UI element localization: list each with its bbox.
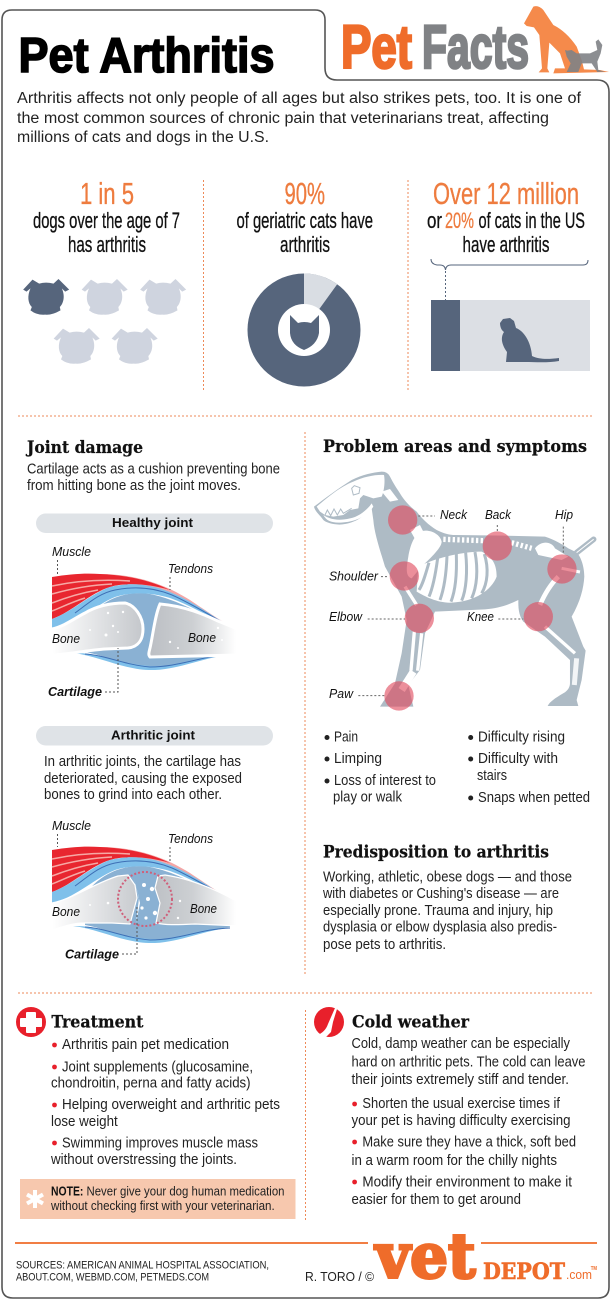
logo wordmark: Facts — [422, 13, 529, 81]
label: tendons — [168, 831, 213, 862]
heading: predisposition: Predisposition to arthritis — [323, 843, 549, 863]
diagram: arthritic joint — [52, 818, 240, 962]
label: cartilage — [65, 907, 137, 962]
label: bone right: Bone — [188, 630, 216, 645]
label: neck: Neck — [440, 507, 468, 522]
stat line with orange 20%: or — [427, 208, 442, 233]
stat: 90% of cats: of geriatric cats have — [236, 208, 373, 233]
panel: cold weather — [314, 1007, 586, 1208]
cold weather text: hard on arthritic pets. The cold can leave — [352, 1055, 586, 1071]
label pill: healthy joint: Healthy joint — [112, 515, 194, 530]
label: muscle — [52, 818, 91, 847]
symptoms list right — [468, 730, 590, 806]
icon: dog faces — [23, 279, 186, 364]
heading: treatment: Treatment — [51, 1013, 144, 1033]
label: muscle: Muscle — [52, 544, 91, 559]
label: hip: Hip — [555, 507, 573, 522]
symptoms list right: Difficulty rising — [478, 730, 565, 746]
stat: 90% of cats: 90% — [284, 176, 325, 211]
heading: problem areas: Problem areas and symptoms — [323, 437, 587, 457]
treatment list: lose weight — [51, 1114, 118, 1130]
cold weather list — [352, 1096, 576, 1208]
predisposition text: Working, athletic, obese dogs — and those — [323, 870, 572, 886]
predisposition text — [322, 870, 572, 953]
callout: note — [20, 1179, 296, 1219]
icon: asterisk — [27, 1190, 43, 1208]
logo wordmark — [341, 13, 529, 81]
label: cartilage — [48, 648, 118, 699]
cold weather text — [352, 1036, 586, 1088]
stat: 90% of cats — [236, 176, 373, 386]
callout: note: Never give your dog human medication — [86, 1185, 285, 1199]
callout: note: NOTE: — [51, 1185, 83, 1199]
intro text — [17, 90, 582, 146]
stat: 1 in 5 dogs: has arthritis — [68, 232, 146, 257]
title: Pet Arthritis — [18, 29, 274, 83]
heading: cold weather: Cold weather — [352, 1013, 470, 1033]
treatment list — [50, 1037, 280, 1168]
label pill: arthritic joint — [36, 726, 273, 746]
icon: grey cat — [565, 39, 605, 72]
panel: problem areas and symptoms — [314, 437, 594, 806]
logo: vet depot: .com — [566, 1267, 592, 1282]
icon: red circle with bone — [314, 1007, 344, 1037]
bracket — [431, 259, 588, 270]
diagram: healthy joint — [48, 544, 240, 699]
arthritic joint text: deteriorated, causing the exposed — [44, 771, 242, 787]
treatment list: without overstressing the joints. — [50, 1152, 237, 1168]
symptoms list right: stairs — [477, 768, 507, 784]
stat line with orange 20% — [427, 208, 585, 233]
label: bone left: Bone — [52, 904, 80, 919]
cold weather list: Shorten the usual exercise times if — [362, 1096, 561, 1112]
label: muscle: Muscle — [52, 818, 91, 833]
credit: R. TORO / © — [305, 1270, 375, 1284]
joint damage text: Cartilage acts as a cushion preventing bone — [27, 462, 280, 478]
panel: predisposition — [322, 843, 572, 953]
symptoms list right: Difficulty with — [478, 751, 558, 767]
symptoms list left — [324, 730, 436, 806]
stat: 1 in 5 dogs: 1 in 5 — [80, 176, 134, 211]
symptoms list right: Snaps when petted — [478, 790, 590, 806]
symptoms list left: Limping — [334, 751, 382, 767]
stat: 1 in 5 dogs — [23, 176, 186, 364]
diagram: dog skeleton — [314, 472, 594, 711]
intro text: millions of cats and dogs in the U.S. — [17, 129, 269, 146]
treatment list: Helping overweight and arthritic pets — [62, 1097, 280, 1113]
cold weather list: easier for them to get around — [352, 1192, 521, 1208]
predisposition text: especially prone. Trauma and injury, hip — [323, 903, 553, 919]
stat: over 12 million — [427, 176, 590, 371]
heading: joint damage: Joint damage — [25, 438, 143, 458]
panel: treatment — [16, 1007, 296, 1219]
label: back: Back — [485, 507, 512, 522]
logo: vet depot: TM — [591, 1266, 597, 1272]
label: tendons — [168, 561, 213, 590]
symptoms list left: play or walk — [333, 790, 403, 806]
cold weather list: in a warm room for the chilly nights — [352, 1153, 557, 1169]
arthritic joint text — [44, 754, 242, 803]
label: knee: Knee — [467, 609, 494, 624]
logo wordmark: Pet — [341, 13, 412, 81]
arthritic joint text: In arthritic joints, the cartilage has — [44, 754, 241, 770]
label: bone left: Bone — [52, 631, 80, 646]
cold weather text: their joints extremely stiff and tender. — [352, 1072, 569, 1088]
bar chart with cat — [431, 300, 590, 371]
stat: 90% of cats: arthritis — [280, 232, 330, 257]
sources — [16, 1260, 269, 1284]
logo: PetFacts — [341, 6, 609, 81]
logo: vet depot — [374, 1220, 597, 1292]
logo: vet depot: DEPOT — [483, 1259, 566, 1285]
intro text: Arthritis affects not only people of all ages but also strikes pets, too. It is one of — [17, 90, 582, 107]
donut chart — [248, 274, 360, 386]
cold weather text: Cold, damp weather can be especially — [352, 1036, 571, 1052]
label: cartilage: Cartilage — [65, 946, 119, 962]
symptoms list left: Pain — [334, 730, 358, 746]
label pill: arthritic joint: Arthritic joint — [111, 728, 196, 742]
label: paw: Paw — [329, 686, 355, 701]
label: muscle — [52, 544, 91, 575]
cold weather list: your pet is having difficulty exercising — [352, 1113, 570, 1129]
icon: orange dog — [524, 6, 609, 73]
treatment list: Arthritis pain pet medication — [62, 1037, 229, 1053]
predisposition text: dysplasia or elbow dysplasia also predis- — [323, 920, 557, 936]
callout: note: without checking first with your veterinarian. — [50, 1199, 275, 1213]
label: tendons: Tendons — [168, 561, 213, 576]
symptoms list left: Loss of interest to — [334, 773, 436, 789]
panel: joint damage — [25, 438, 280, 962]
predisposition text: with diabetes or Cushing's disease — are — [322, 886, 559, 902]
stat: over 12 million: have arthritis — [462, 232, 550, 257]
cold weather list: Make sure they have a thick, soft bed — [362, 1135, 576, 1151]
icon: red cross — [16, 1007, 46, 1037]
predisposition text: pose pets to arthritis. — [323, 937, 446, 953]
label: elbow: Elbow — [329, 609, 363, 624]
intro text: the most common sources of chronic pain that veterinarians treat, affecting — [17, 110, 549, 127]
joint damage text — [27, 462, 280, 494]
sources: SOURCES: AMERICAN ANIMAL HOSPITAL ASSOCIATION, — [16, 1260, 269, 1272]
sources: ABOUT.COM, WEBMD.COM, PETMEDS.COM — [16, 1272, 209, 1284]
label: tendons: Tendons — [168, 831, 213, 846]
label: cartilage: Cartilage — [48, 684, 102, 699]
cold weather list: Modify their environment to make it — [362, 1175, 572, 1191]
label pill: healthy joint — [36, 514, 273, 533]
label: shoulder: Shoulder — [329, 568, 379, 584]
joint damage text: from hitting bone as the joint moves. — [27, 478, 241, 494]
skull and cervical bones — [317, 475, 423, 539]
treatment list: Joint supplements (glucosamine, — [62, 1060, 253, 1076]
stat line with orange 20%: 20% — [445, 208, 474, 233]
treatment list: Swimming improves muscle mass — [62, 1136, 258, 1152]
label: bone right: Bone — [190, 901, 217, 916]
stat: 1 in 5 dogs: dogs over the age of 7 — [33, 208, 180, 233]
logo: vet depot: vet — [374, 1220, 476, 1292]
treatment list: chondroitin, perna and fatty acids) — [51, 1076, 251, 1092]
footer rule — [15, 1242, 597, 1244]
arthritic joint text: bones to grind into each other. — [44, 787, 222, 803]
